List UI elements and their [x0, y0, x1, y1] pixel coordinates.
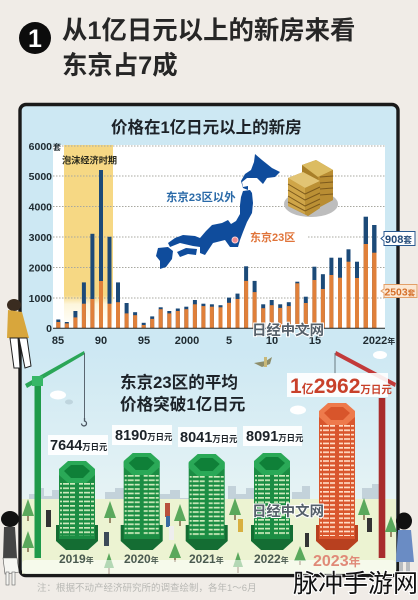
y axis labels: 0 [46, 323, 52, 335]
lower heading: 价格突破1亿日元 [120, 394, 246, 414]
y axis labels [29, 141, 52, 335]
x axis labels: 95 [138, 335, 150, 347]
price label: 2019: 7644万日元 [50, 438, 108, 454]
ground [22, 499, 396, 574]
building: 2019 [56, 461, 98, 550]
y axis labels: 4000 [29, 202, 52, 214]
y axis labels: 5000 [29, 171, 52, 183]
trees [22, 498, 397, 574]
source note: scene: 注：根据不动产经济研究所的调查绘制，各年1～6月 [37, 582, 257, 594]
watermark: scene: 日经中文网 [252, 502, 324, 520]
panel: bar chart [29, 141, 417, 347]
lower heading: 东京23区的平均 [120, 372, 238, 392]
building: 2023 [316, 403, 358, 550]
panel heading: 价格在1亿日元以上的新房 [111, 117, 302, 137]
grid lines [53, 146, 385, 298]
year labels: 2023年 [313, 553, 361, 570]
number badge [19, 22, 51, 54]
x axis labels: 10 [266, 335, 278, 347]
year labels: 2022年 [254, 552, 289, 566]
title: 从1亿日元以上的新房来看 [62, 17, 355, 45]
x axis labels: 2022年 [363, 335, 395, 347]
panel: lower scene background [22, 349, 396, 574]
watermark: chart: 日经中文网 [252, 321, 324, 339]
price label: 2023: 1亿2962万日元 [290, 375, 392, 398]
callout: 2503 [381, 284, 417, 298]
source note: chart: 注：根据东京KANTEI的调查绘制 [96, 349, 223, 360]
figure: woman at bottom left [1, 511, 19, 585]
x axis labels: 15 [309, 335, 321, 347]
panel: frame [20, 104, 398, 576]
y axis labels: 1000 [29, 293, 52, 305]
y axis labels: 3000 [29, 232, 52, 244]
building: 2022 [251, 453, 293, 550]
year labels: 2020年 [124, 552, 159, 566]
price label: 2020: 8190万日元 [115, 428, 173, 444]
x axis [53, 327, 385, 329]
y axis labels: 6000 [29, 141, 52, 153]
bubble period label: 泡沫经济时期 [62, 154, 117, 166]
map of Japan [156, 154, 280, 269]
x axis labels: 2000 [175, 335, 199, 347]
y axis unit: 套 [53, 142, 61, 152]
lower heading [120, 372, 246, 414]
price label: 2021: 8041万日元 [180, 430, 238, 446]
legend: other wards: 东京23区以外 [166, 190, 236, 204]
icon: small plane [254, 357, 272, 367]
price label: 2022: 8091万日元 [246, 429, 304, 445]
skyline [29, 484, 382, 510]
watermark: site name: 脉冲手游网 [293, 564, 418, 600]
x axis labels [52, 335, 395, 347]
figure: man at top left [7, 299, 31, 368]
figure: woman at bottom right [396, 512, 414, 574]
small pedestrians [46, 503, 372, 547]
y axis labels: 2000 [29, 262, 52, 274]
callout: 908 [381, 232, 415, 246]
Tokyo marker [232, 237, 238, 243]
title [62, 17, 355, 80]
number badge: 1 [28, 25, 42, 53]
chart plot background [53, 145, 385, 328]
title: 东京占7成 [62, 52, 178, 80]
year labels: 2021年 [189, 552, 224, 566]
building: 2021 [186, 454, 228, 550]
icon: green crane [25, 351, 86, 558]
clouds [50, 351, 387, 414]
x axis labels: 90 [95, 335, 107, 347]
legend: Tokyo 23 wards: 东京23区 [250, 230, 295, 244]
bars: Tokyo 23 wards (orange) [56, 244, 377, 328]
building: 2020 [121, 453, 163, 550]
bubble economy band [64, 145, 113, 328]
callout: 2503: 2503套 [384, 288, 416, 298]
pale foreground strip [22, 560, 396, 574]
year labels: 2019年 [59, 552, 94, 566]
bars: other wards (blue) [56, 170, 377, 328]
icon: gold brick stacks [284, 160, 338, 217]
x axis labels: 85 [52, 335, 64, 347]
x axis labels: 5 [226, 335, 232, 347]
callout: 908: 908套 [385, 234, 412, 246]
icon: red crane [335, 351, 396, 558]
year labels [59, 552, 361, 570]
